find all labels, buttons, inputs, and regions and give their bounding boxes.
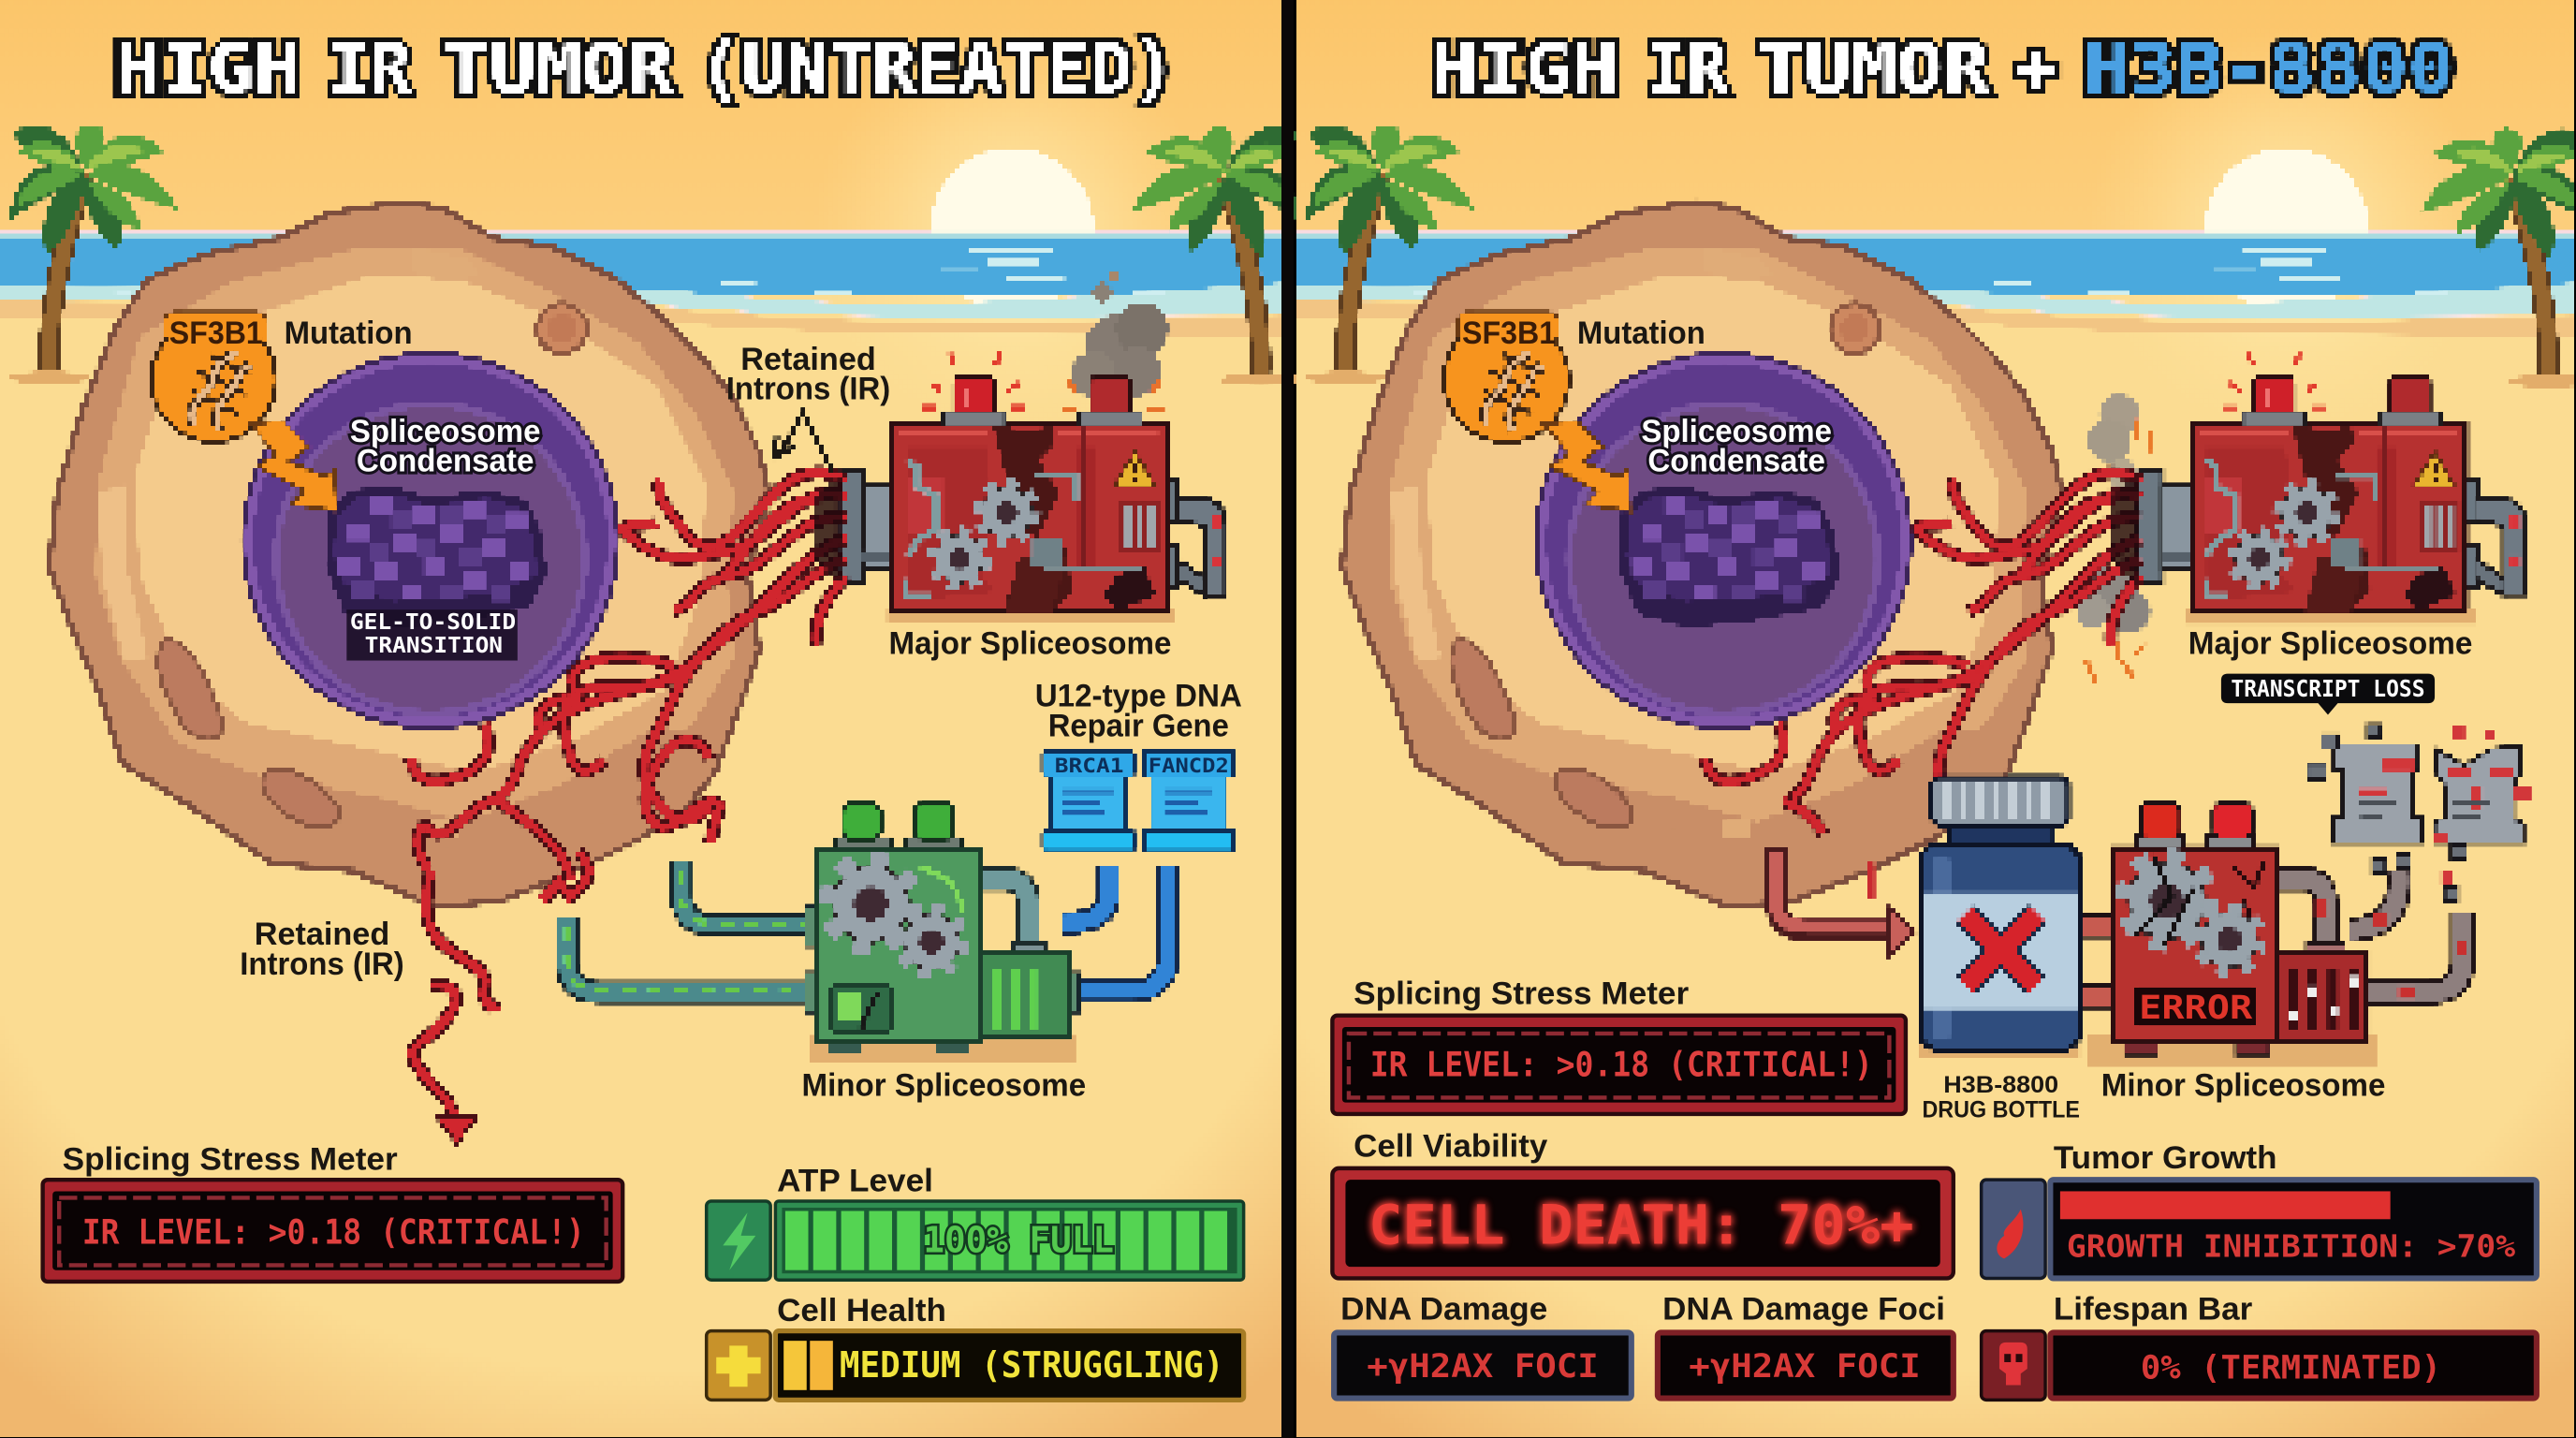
- heading: left title: (UNTREATED): [698, 29, 1177, 109]
- text labels: left panel diagram: Introns (IR): [240, 946, 404, 982]
- retained intron strands to machine: [411, 473, 846, 1144]
- text labels: right panel diagram: Spliceosome: [1641, 414, 1832, 449]
- meter: DNA damage foci: DNA Damage Foci: [1662, 1291, 1945, 1327]
- text labels: right panel diagram: [1462, 315, 2472, 1123]
- icon: left palm tree: [10, 125, 178, 385]
- heading: right title: H3B-8800: [2083, 29, 2454, 109]
- meter: cell viability: [1332, 1129, 1954, 1278]
- heading: right title: HIGH: [1431, 29, 1618, 109]
- meter: tumor growth: Tumor Growth: [2054, 1140, 2277, 1176]
- drug bottle: [1921, 777, 2080, 1058]
- smoke around connector: [2076, 394, 2150, 633]
- meter: lifespan bar: 0% (TERMINATED): [2141, 1349, 2441, 1387]
- text labels: left panel diagram: Retained: [255, 917, 389, 952]
- meter: ATP level: ATP Level: [777, 1163, 933, 1198]
- repair gene scrolls BRCA1 and FANCD2: [1043, 751, 1234, 851]
- meter: splicing stress: Splicing Stress Meter: [1354, 976, 1689, 1011]
- text labels: left panel diagram: BRCA1: [1055, 754, 1123, 777]
- meter: cell health: [707, 1293, 1244, 1400]
- meter: DNA damage foci: +γH2AX FOCI: [1689, 1347, 1921, 1386]
- meter: ATP level: [707, 1163, 1244, 1280]
- text labels: left panel diagram: Condensate: [357, 444, 534, 479]
- meter: splicing stress: IR LEVEL: >0.18 (CRITICAL!): [82, 1212, 585, 1253]
- meter: cell health: MEDIUM (STRUGGLING): [840, 1344, 1224, 1387]
- icon: right palm tree: [1132, 126, 1299, 386]
- shattered repair gene scrolls: [2308, 725, 2530, 901]
- text labels: left panel diagram: U12-type DNA: [1035, 679, 1242, 714]
- meter: cell health: Cell Health: [777, 1293, 946, 1328]
- meter: cell viability: Cell Viability: [1354, 1129, 1547, 1165]
- meter: splicing stress: IR LEVEL: >0.18 (CRITICAL!): [1370, 1045, 1873, 1085]
- meter: splicing stress: [1332, 976, 1906, 1114]
- text labels: left panel diagram: SF3B1: [169, 315, 263, 351]
- callout: transcript loss: [2221, 674, 2435, 714]
- text labels: left panel diagram: Spliceosome: [350, 414, 540, 449]
- major spliceosome machine (drug hit): [2137, 376, 2525, 624]
- tumor cell with nucleus and condensate: [50, 202, 768, 907]
- meter: lifespan bar: [1982, 1291, 2537, 1400]
- heading: right title: TUMOR: [1758, 29, 1990, 109]
- text labels: right panel diagram: Mutation: [1577, 315, 1705, 351]
- text labels: right panel diagram: H3B-8800: [1943, 1073, 2058, 1098]
- text labels: left panel diagram: Mutation: [285, 315, 413, 351]
- callout: transcript loss: TRANSCRIPT LOSS: [2231, 675, 2425, 702]
- text labels: left panel diagram: FANCD2: [1149, 754, 1229, 777]
- panel: left tumor diagram art: [50, 202, 1234, 1144]
- panel: right status meters: [1332, 976, 2537, 1400]
- divider between panels: [1281, 0, 1294, 1438]
- icon: right palm tree: [2420, 128, 2576, 388]
- heading: left title: IR: [329, 29, 411, 109]
- meter: DNA damage: +γH2AX FOCI: [1367, 1347, 1599, 1386]
- text labels: left panel diagram: TRANSITION: [365, 634, 503, 658]
- minor spliceosome machine (broken): [2080, 803, 2467, 1064]
- meter: ATP level: 100% FULL: [923, 1219, 1114, 1261]
- text labels: right panel diagram: SF3B1: [1462, 315, 1556, 351]
- panel: right beach background: [1295, 0, 2576, 1438]
- text labels: left panel diagram: Retained: [740, 342, 876, 377]
- meter: tumor growth: GROWTH INHIBITION: >70%: [2067, 1228, 2515, 1265]
- icon: sparks: [2086, 353, 2324, 683]
- text labels: left panel diagram: Repair Gene: [1048, 708, 1229, 743]
- minor spliceosome machine (healthy): [567, 803, 1168, 1064]
- heading: left title: TUMOR: [444, 29, 674, 109]
- meter: lifespan bar: Lifespan Bar: [2054, 1291, 2252, 1327]
- blocked intron arrow: [1776, 848, 1915, 955]
- text labels: left panel diagram: Minor Spliceosome: [801, 1068, 1086, 1104]
- text labels: right panel diagram: Major Spliceosome: [2188, 626, 2472, 662]
- heading: left title: [115, 29, 1177, 109]
- meter: splicing stress: Splicing Stress Meter: [63, 1142, 398, 1178]
- heading: right title: [1431, 29, 2454, 109]
- meter: DNA damage: [1334, 1291, 1632, 1399]
- text labels: right panel diagram: ERROR: [2139, 989, 2253, 1027]
- heading: right title: +: [2016, 29, 2058, 109]
- icon: SF3B1 mutation badge: [151, 312, 337, 511]
- text labels: left panel diagram: Introns (IR): [726, 371, 890, 406]
- icon: left palm tree: [1306, 125, 1473, 385]
- meter: tumor growth: [1982, 1140, 2537, 1278]
- meter: cell viability: CELL DEATH: 70%+: [1368, 1194, 1914, 1257]
- text labels: left panel diagram: Major Spliceosome: [889, 626, 1171, 662]
- panel: left beach background: [0, 0, 1299, 1438]
- meter: DNA damage foci: [1658, 1291, 1954, 1399]
- major spliceosome machine: [838, 376, 1225, 624]
- text labels: right panel diagram: Minor Spliceosome: [2101, 1068, 2385, 1104]
- retained intron strands: [1705, 473, 2141, 835]
- smoke from major spliceosome: [1071, 271, 1168, 398]
- icon: alarm sparks: [923, 353, 1164, 411]
- arrows: retained introns pointer: [774, 413, 833, 472]
- heading: right title: IR: [1647, 29, 1729, 109]
- panel: right tumor diagram art: [1342, 202, 2530, 1064]
- heading: left title: HIGH: [115, 29, 300, 109]
- icon: SF3B1 mutation badge: [1444, 312, 1630, 511]
- meter: DNA damage: DNA Damage: [1340, 1291, 1547, 1327]
- panel: left status meters: [43, 1142, 1244, 1400]
- meter: splicing stress: [43, 1142, 622, 1282]
- text labels: left panel diagram: GEL-TO-SOLID: [350, 610, 516, 635]
- text labels: right panel diagram: DRUG BOTTLE: [1922, 1097, 2080, 1123]
- tumor cell with nucleus and condensate: [1342, 202, 2062, 907]
- text labels: left panel diagram: [169, 315, 1242, 1104]
- text labels: right panel diagram: Condensate: [1647, 444, 1825, 479]
